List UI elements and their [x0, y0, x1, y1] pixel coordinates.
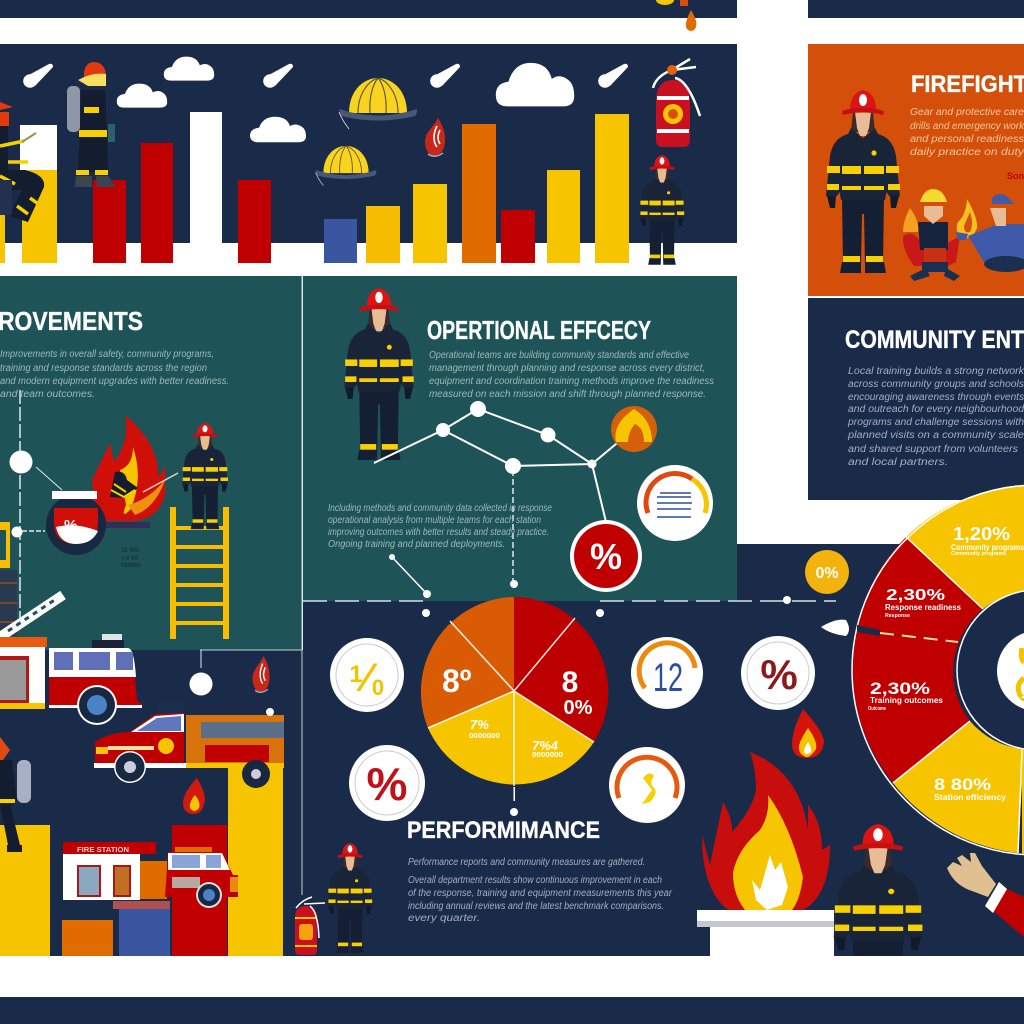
- panel: improvements: [0, 276, 302, 650]
- icon: small flame: [792, 709, 824, 758]
- body text: Improvements in overall safety, community programs,: [0, 349, 214, 360]
- badge one-zero: [330, 638, 404, 712]
- firefighter figure: [344, 288, 414, 460]
- panel: community (navy text card): [808, 298, 1024, 500]
- fire truck middle: [94, 703, 284, 768]
- firefighter right of chart: [640, 155, 684, 265]
- icon: yellow ladder: [170, 507, 229, 639]
- body text: and outreach for every neighbourhood: [848, 404, 1024, 415]
- fire truck lower: [165, 847, 238, 908]
- icon: percent badge: [570, 520, 642, 592]
- icon: hand: [947, 853, 1024, 937]
- icon: yellow helmets: [316, 78, 417, 186]
- tiny caption: + 0 00: [121, 556, 139, 562]
- truck and station group: [0, 634, 284, 956]
- pie labels: 0%: [564, 697, 593, 719]
- icon: small flame drop: [425, 118, 445, 156]
- donut labels: Response readiness: [885, 603, 962, 612]
- tiny caption: 20 000: [121, 548, 140, 554]
- panel: firefighter orange: [808, 44, 1024, 296]
- body text: programs and challenge sessions with: [847, 417, 1024, 428]
- fire station lower: [63, 842, 170, 909]
- donut labels: Community programs: [951, 551, 1006, 557]
- body text: [0, 349, 229, 400]
- check marks: [23, 64, 628, 88]
- badge gauge: [609, 747, 685, 823]
- firefighter with air tank: [67, 62, 116, 187]
- tiny caption: 000000: [121, 563, 142, 569]
- performance text: [408, 857, 673, 924]
- performance text: including annual reviews and the latest benchmark comparisons.: [408, 901, 664, 912]
- donut labels: 8 80%: [934, 775, 991, 794]
- body text: and shared support from volunteers: [848, 444, 1018, 455]
- icon: fire extinguisher: [653, 59, 700, 147]
- second body text: [328, 503, 552, 550]
- pie labels: 0000000: [532, 752, 563, 759]
- dots and connectors around pie: [422, 596, 791, 816]
- body text: management through planning and response across every district,: [429, 363, 705, 374]
- badge twelve: 12: [653, 656, 683, 700]
- firefighter figure: [826, 90, 900, 273]
- badge twelve: [631, 637, 703, 709]
- pie labels: 8: [562, 666, 578, 699]
- badge percent red: [349, 745, 425, 821]
- small red tag: Son: [1007, 171, 1024, 181]
- firefighter seated on bar: [0, 102, 44, 222]
- body text: [910, 107, 1024, 158]
- fire station upper: [0, 637, 47, 709]
- pie labels: [442, 663, 593, 759]
- body text: measured on each mission and shift through planned response.: [429, 389, 706, 400]
- body text: and local partners.: [848, 457, 948, 468]
- donut labels: [868, 524, 1024, 802]
- donut centre badge: [997, 631, 1024, 711]
- body text: encouraging awareness through events: [848, 392, 1024, 403]
- second body text: Including methods and community data collected in response: [328, 503, 552, 514]
- firefighter on ladder: [182, 423, 228, 529]
- pie chart: [421, 597, 608, 786]
- performance text: Overall department results show continuous improvement in each: [408, 875, 662, 886]
- fire truck upper: [49, 634, 142, 725]
- donut labels: 2,30%: [886, 587, 945, 604]
- network line graph: [374, 401, 634, 598]
- heading: OPERTIONAL EFFCECY: [427, 315, 651, 345]
- seated crew with flames: [903, 189, 1024, 281]
- badge percent dark: [741, 636, 815, 710]
- badge percent red: %: [367, 758, 407, 810]
- clouds: [117, 57, 574, 142]
- donut chart: [821, 485, 1024, 855]
- partial firefighter left edge: [0, 737, 31, 852]
- performance text: Performance reports and community measures are gathered.: [408, 857, 645, 868]
- badge one-zero: 1: [349, 661, 363, 688]
- badge zero percent: [805, 550, 849, 594]
- partial ladder: [0, 522, 63, 637]
- body text: planned visits on a community scale: [847, 430, 1024, 441]
- pie labels: 7%: [470, 717, 489, 732]
- pie labels: 7%4: [532, 738, 559, 753]
- firefighter performance: [328, 843, 372, 953]
- panel: bar chart: [0, 44, 737, 265]
- tiny caption: [121, 548, 142, 569]
- donut labels: 2,30%: [870, 679, 930, 698]
- second body text: improving outcomes with better results and steady practice.: [328, 527, 549, 538]
- icon: percent badge: %: [590, 536, 622, 577]
- icon: gauge document badge: [637, 465, 713, 541]
- body text: daily practice on duty: [910, 147, 1024, 158]
- body text: across community groups and schools: [848, 379, 1024, 390]
- body text: [429, 350, 714, 400]
- panel: operational efficiency: [303, 276, 737, 601]
- firefighter bottom right: [834, 824, 922, 1020]
- pie labels: 8º: [442, 663, 472, 699]
- emblem label: %: [64, 517, 77, 534]
- top banner strips: [0, 0, 1024, 31]
- yellow and red column chart: [0, 768, 283, 956]
- second body text: Ongoing training and planned deployments.: [328, 539, 505, 550]
- bottom band: [0, 956, 1024, 1024]
- pointer tip: [821, 620, 849, 636]
- body text: training and response standards across the region: [0, 363, 207, 374]
- badge one-zero: ⁄: [356, 656, 379, 700]
- body text: Local training builds a strong network: [848, 366, 1024, 377]
- body text: and personal readiness: [910, 134, 1024, 145]
- body text: [847, 366, 1024, 468]
- fire station lower: FIRE STATION: [77, 847, 129, 854]
- donut labels: 1,20%: [953, 524, 1010, 544]
- body text: Operational teams are building community standards and effective: [429, 350, 689, 361]
- icon: large flame on pedestal: [697, 752, 834, 956]
- wheels for middle truck: [114, 751, 270, 788]
- second body text: operational analysis from multiple teams for each station: [328, 515, 541, 526]
- icon: lower fire extinguisher: [295, 897, 325, 955]
- bars: [0, 112, 629, 264]
- timeline nodes: [10, 390, 62, 620]
- flames and node: [183, 650, 270, 814]
- body text: equipment and coordination training methods improve the readiness: [429, 376, 714, 387]
- performance heading: PERFORMIMANCE: [407, 817, 600, 844]
- pie labels: 0000000: [469, 733, 500, 740]
- donut labels: Training outcomes: [870, 696, 944, 705]
- donut labels: Outcome: [868, 706, 886, 712]
- heading: ROVEMENTS: [0, 306, 143, 336]
- badge zero percent: 0%: [815, 565, 839, 582]
- badge one-zero: 0: [372, 675, 384, 700]
- icon: fire badge: [611, 406, 657, 452]
- badge percent dark: %: [760, 651, 798, 698]
- percent badges around pie: [330, 550, 849, 823]
- performance text: of the response, training and equipment measurements this year: [408, 888, 673, 899]
- performance text: every quarter.: [408, 913, 480, 924]
- icon: flame with firefighter and hose reel: [46, 415, 178, 555]
- body text: Gear and protective care: [910, 107, 1024, 118]
- body text: and team outcomes.: [0, 389, 95, 400]
- body text: and modern equipment upgrades with better readiness.: [0, 376, 229, 387]
- body text: drills and emergency work: [910, 121, 1024, 132]
- panel: lower navy field: [0, 276, 1024, 956]
- donut labels: Response: [885, 613, 910, 619]
- donut labels: Station efficiency: [934, 793, 1007, 802]
